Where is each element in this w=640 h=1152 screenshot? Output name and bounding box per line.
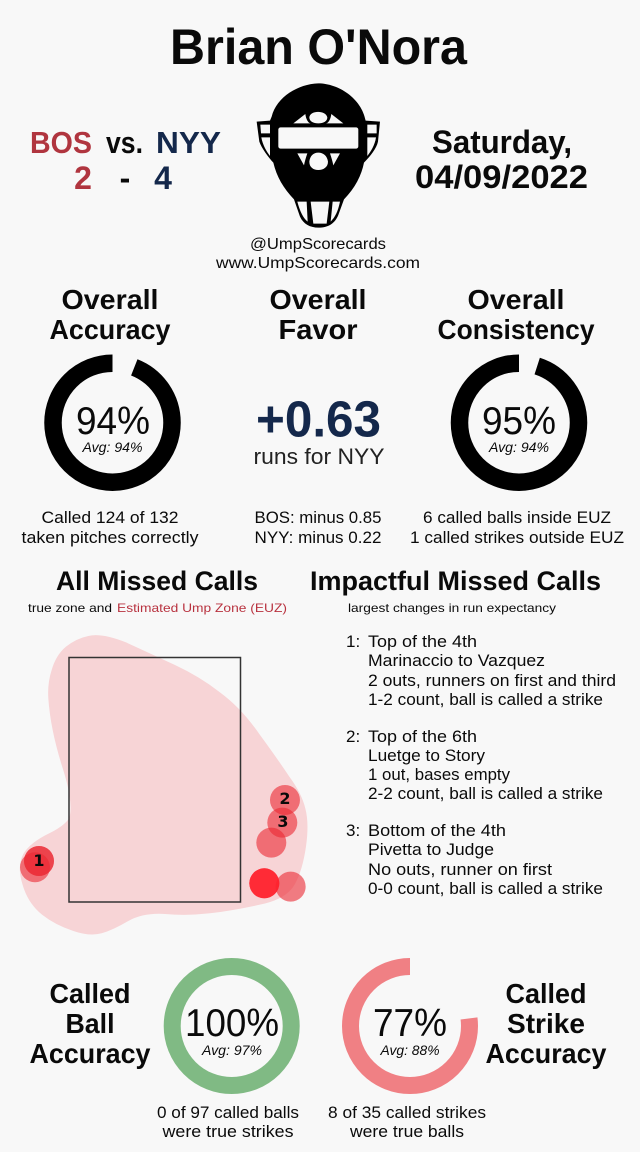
- game matchup and score: [30, 125, 221, 196]
- caption: consistency: 1 called strikes outside EUZ: [410, 528, 624, 547]
- handle and website: www.UmpScorecards.com: [215, 255, 420, 272]
- heading: overall favor: [270, 284, 366, 345]
- game matchup and score: NYY: [156, 125, 221, 160]
- missed call 2: Top of the 6th: [368, 727, 477, 746]
- missed call 2: 1 out, bases empty: [368, 765, 510, 784]
- estimated ump zone: [20, 635, 307, 935]
- missed call markers: [20, 785, 306, 902]
- game date: [415, 124, 588, 195]
- heading: overall accuracy: [50, 284, 171, 345]
- caption: favor: BOS: minus 0.85: [254, 508, 382, 527]
- donut: 100%: [172, 966, 291, 1086]
- missed call 2: [346, 727, 603, 803]
- heading: called strike accuracy: Strike: [507, 1008, 585, 1039]
- panel: overall favor: [254, 284, 385, 547]
- missed call 1: [346, 632, 616, 709]
- caption: called strikes: [328, 1103, 486, 1141]
- panel: overall accuracy: [22, 284, 199, 547]
- value: 95%: 95%: [482, 400, 556, 443]
- average: 94%: Avg: 94%: [488, 439, 549, 455]
- heading: overall favor: Overall: [270, 284, 366, 315]
- caption: accuracy: [22, 508, 199, 547]
- game date: Saturday,: [432, 124, 572, 160]
- average: 88%: Avg: 88%: [380, 1042, 440, 1058]
- caption: called strikes: 8 of 35 called strikes: [328, 1103, 486, 1122]
- caption: called balls: [157, 1103, 299, 1141]
- missed call 2: Luetge to Story: [368, 746, 485, 765]
- title: Brian O'Nora: [170, 19, 468, 75]
- missed call 1: 2 outs, runners on first and third: [368, 671, 616, 690]
- game matchup and score: -: [120, 160, 130, 196]
- handle and website: [215, 236, 420, 272]
- caption: accuracy: taken pitches correctly: [22, 528, 199, 547]
- subheading: zone legend: [28, 601, 287, 615]
- average: 94%: Avg: 94%: [81, 439, 142, 455]
- marker numbers: 1: [33, 851, 45, 870]
- donut: 77%: [350, 966, 470, 1086]
- heading: overall consistency: Consistency: [438, 314, 595, 345]
- game matchup and score: BOS: [30, 125, 92, 160]
- panel: called strike accuracy: [328, 966, 607, 1141]
- heading: called ball accuracy: Called: [50, 978, 130, 1009]
- heading: called strike accuracy: Accuracy: [486, 1038, 607, 1069]
- handle and website: @UmpScorecards: [250, 236, 386, 253]
- heading: called strike accuracy: [486, 978, 607, 1069]
- value: +0.63: +0.63: [256, 390, 381, 448]
- heading: overall consistency: [438, 284, 595, 345]
- icon: umpire mask: [257, 83, 380, 228]
- missed call 3: Pivetta to Judge: [368, 840, 494, 859]
- missed call 3: 0-0 count, ball is called a strike: [368, 879, 603, 898]
- value: 94%: 94%: [76, 400, 150, 443]
- heading: called strike accuracy: Called: [506, 978, 586, 1009]
- donut: 94%: [53, 363, 172, 482]
- subheading: zone legend: Estimated Ump Zone (EUZ): [117, 601, 287, 615]
- missed call 1: 1:: [346, 632, 360, 651]
- caption: favor: NYY: minus 0.22: [254, 528, 382, 547]
- caption: consistency: [410, 508, 624, 547]
- caption: accuracy: Called 124 of 132: [42, 508, 178, 527]
- subheading: run expectancy: largest changes in run expectancy: [348, 601, 556, 615]
- chart: missed calls strike zone: [20, 635, 307, 935]
- marker numbers: 2: [279, 789, 291, 808]
- heading: overall accuracy: Accuracy: [50, 314, 171, 345]
- true strike zone: [69, 658, 240, 902]
- caption: called balls: were true strikes: [161, 1122, 294, 1141]
- game matchup and score: 2: [74, 160, 92, 196]
- average: 97%: Avg: 97%: [201, 1042, 262, 1058]
- missed call 3: No outs, runner on first: [368, 860, 552, 879]
- caption: called balls: 0 of 97 called balls: [157, 1103, 299, 1122]
- donut: 95%: [460, 363, 578, 482]
- missed call 2: 2:: [346, 727, 360, 746]
- caption: consistency: 6 called balls inside EUZ: [423, 508, 611, 527]
- subheading: zone legend: true zone and: [28, 601, 112, 615]
- game matchup and score: 4: [154, 160, 172, 196]
- panel: overall consistency: [410, 284, 624, 547]
- heading: called ball accuracy: [30, 978, 151, 1069]
- heading: impactful missed calls: Impactful Missed Calls: [310, 566, 601, 596]
- value: 77%: 77%: [373, 1002, 447, 1045]
- missed call 3: Bottom of the 4th: [368, 821, 506, 840]
- missed call 2: 2-2 count, ball is called a strike: [368, 784, 603, 803]
- heading: overall favor: Favor: [278, 314, 358, 345]
- marker numbers: 3: [277, 812, 289, 831]
- marker numbers: [33, 789, 291, 870]
- panel: called ball accuracy: [30, 966, 299, 1141]
- caption: called strikes: were true balls: [349, 1122, 464, 1141]
- missed call 1: Top of the 4th: [368, 632, 477, 651]
- missed call 3: [346, 821, 603, 898]
- heading: overall accuracy: Overall: [62, 284, 158, 315]
- heading: all missed calls: All Missed Calls: [56, 566, 258, 596]
- heading: called ball accuracy: Ball: [66, 1008, 114, 1039]
- game date: 04/09/2022: [415, 159, 588, 195]
- game matchup and score: vs.: [106, 125, 143, 160]
- value: 100%: 100%: [185, 1002, 279, 1045]
- caption: favor: [254, 508, 382, 547]
- missed call 3: 3:: [346, 821, 360, 840]
- missed call 1: 1-2 count, ball is called a strike: [368, 690, 603, 709]
- label: runs for NYY: runs for NYY: [254, 444, 385, 469]
- missed call 1: Marinaccio to Vazquez: [368, 651, 545, 670]
- heading: called ball accuracy: Accuracy: [30, 1038, 151, 1069]
- heading: overall consistency: Overall: [468, 284, 564, 315]
